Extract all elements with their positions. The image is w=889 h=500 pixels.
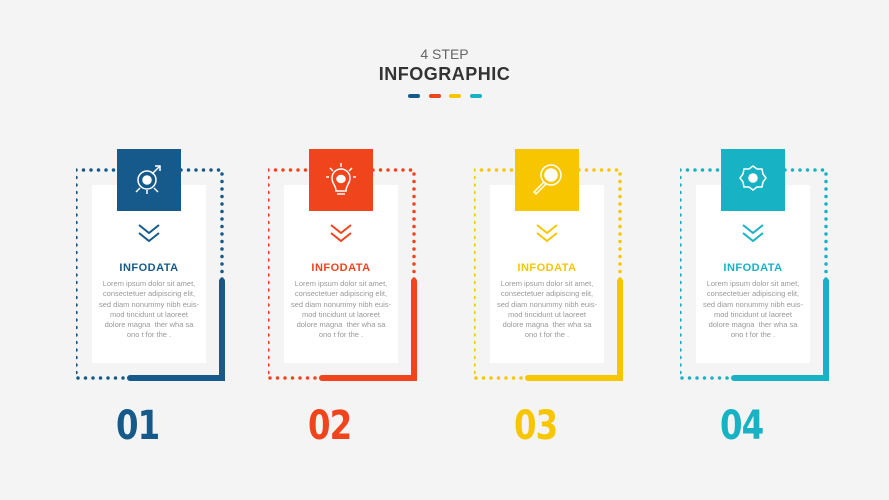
title color dashes [408,94,482,98]
panel: step 2: sed diam nonummy nibh euis- [291,300,391,309]
panel: step 3: INFODATA [517,262,577,274]
panel: step 2: mod tincidunt ut laoreet [302,310,380,319]
panel: step 1: mod tincidunt ut laoreet [110,310,188,319]
panel: step 1: dolore magna ther wha sa [105,320,193,329]
panel: step 3: 03 [514,403,557,449]
panel: step 4: consectetuer adipiscing elit, [707,289,799,298]
panel: step 1: Lorem ipsum dolor sit amet, [103,279,195,288]
panel: step 2 [268,149,417,449]
title: 4 STEP [420,46,469,62]
panel: step 4: dolore magna ther wha sa [709,320,797,329]
panel: step 4: sed diam nonummy nibh euis- [703,300,803,309]
panel: step 2: 02 [308,403,351,449]
panel: step 4: Lorem ipsum dolor sit amet, [707,279,799,288]
panel: step 4: mod tincidunt ut laoreet [714,310,792,319]
panel: step 4: INFODATA [723,262,783,274]
panel: step 1 [76,149,225,449]
panel: step 1: sed diam nonummy nibh euis- [99,300,199,309]
title: INFOGRAPHIC [379,64,510,84]
panel: step 2: Lorem ipsum dolor sit amet, [295,279,387,288]
panel: step 1: INFODATA [119,262,179,274]
panel: step 2: consectetuer adipiscing elit, [295,289,387,298]
panel: step 2: ono t for the . [319,330,363,339]
panel: step 3 [474,149,623,449]
panel: step 4: 04 [720,403,763,449]
panel: step 1: consectetuer adipiscing elit, [103,289,195,298]
panel: step 3: sed diam nonummy nibh euis- [497,300,597,309]
panel: step 1: ono t for the . [127,330,171,339]
panel: step 3: Lorem ipsum dolor sit amet, [501,279,593,288]
title [379,46,510,84]
panel: step 3: mod tincidunt ut laoreet [508,310,586,319]
panel: step 4: ono t for the . [731,330,775,339]
panel: step 4 [680,149,829,449]
panel: step 2: INFODATA [311,262,371,274]
panel: step 3: consectetuer adipiscing elit, [501,289,593,298]
panel: step 3: ono t for the . [525,330,569,339]
panel: step 1: 01 [116,403,159,449]
panel: step 2: dolore magna ther wha sa [297,320,385,329]
panel: step 3: dolore magna ther wha sa [503,320,591,329]
